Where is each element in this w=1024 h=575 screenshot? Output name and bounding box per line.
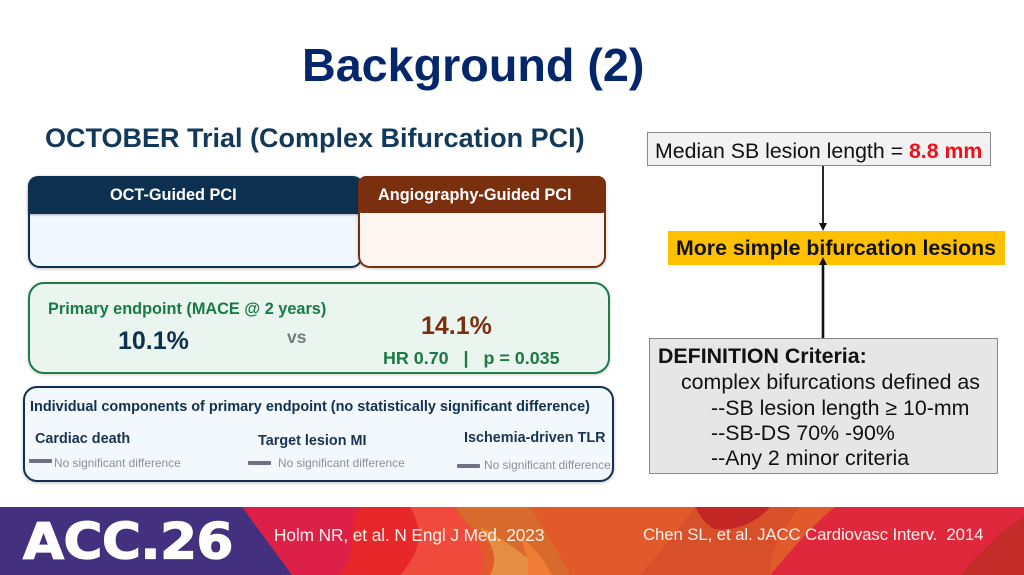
no difference note: No significant difference — [484, 458, 611, 472]
callout: more simple bifurcation lesions — [668, 231, 1005, 265]
criteria list — [711, 396, 969, 470]
components heading: Individual components of primary endpoint (no statistically significant difference) — [30, 399, 590, 415]
callout: median SB lesion length — [647, 132, 991, 166]
header: OCT-guided PCI — [28, 176, 363, 214]
vs: vs — [287, 327, 306, 347]
arrow: median to simple lesions — [819, 166, 827, 231]
arrow: definition to simple lesions — [819, 257, 827, 338]
no difference note: No significant difference — [278, 456, 405, 470]
component: target lesion MI — [248, 433, 405, 470]
hazard ratio and p value: HR 0.70 | p = 0.035 — [383, 348, 560, 368]
callout: median SB lesion length: Median SB lesion length = 8.8 mm — [655, 139, 982, 163]
label: Ischemia-driven TLR — [464, 430, 606, 446]
header: angiography-guided PCI: Angiography-Guided PCI — [378, 186, 572, 204]
criteria list: --Any 2 minor criteria — [711, 446, 909, 470]
panel: individual components — [23, 386, 614, 482]
criteria list: --SB lesion length ≥ 10-mm — [711, 396, 969, 420]
purple logo band — [0, 507, 292, 575]
panel: primary endpoint — [28, 282, 610, 374]
panel: angiography-guided PCI — [358, 176, 606, 268]
citation: Chen: Chen SL, et al. JACC Cardiovasc Interv. 2014 — [643, 525, 983, 544]
panel: OCT-guided PCI — [28, 176, 363, 268]
footer banner — [0, 507, 1024, 575]
callout: more simple bifurcation lesions: More simple bifurcation lesions — [676, 236, 996, 260]
logo: ACC.26: ACC.26 — [23, 513, 233, 571]
header: OCT-guided PCI: OCT-Guided PCI — [110, 186, 237, 204]
label: Target lesion MI — [258, 433, 366, 449]
header: angiography-guided PCI — [358, 176, 606, 213]
component: cardiac death — [29, 431, 181, 470]
subtitle: OCTOBER trial: OCTOBER Trial (Complex Bifurcation PCI) — [45, 123, 585, 153]
definition heading: DEFINITION Criteria: — [658, 344, 867, 368]
definition text: complex bifurcations defined as — [681, 370, 980, 394]
label: Cardiac death — [35, 431, 130, 447]
angiography rate: 14.1% — [421, 312, 492, 340]
no difference note: No significant difference — [54, 456, 181, 470]
panel: definition criteria — [649, 338, 998, 474]
component: ischemia-driven TLR — [457, 430, 611, 472]
primary endpoint label: Primary endpoint (MACE @ 2 years) — [48, 300, 326, 318]
OCT rate: 10.1% — [118, 327, 189, 355]
citation: Holm: Holm NR, et al. N Engl J Med. 2023 — [274, 525, 544, 545]
title: Background (2) — [302, 39, 644, 91]
criteria list: --SB-DS 70% -90% — [711, 421, 895, 445]
